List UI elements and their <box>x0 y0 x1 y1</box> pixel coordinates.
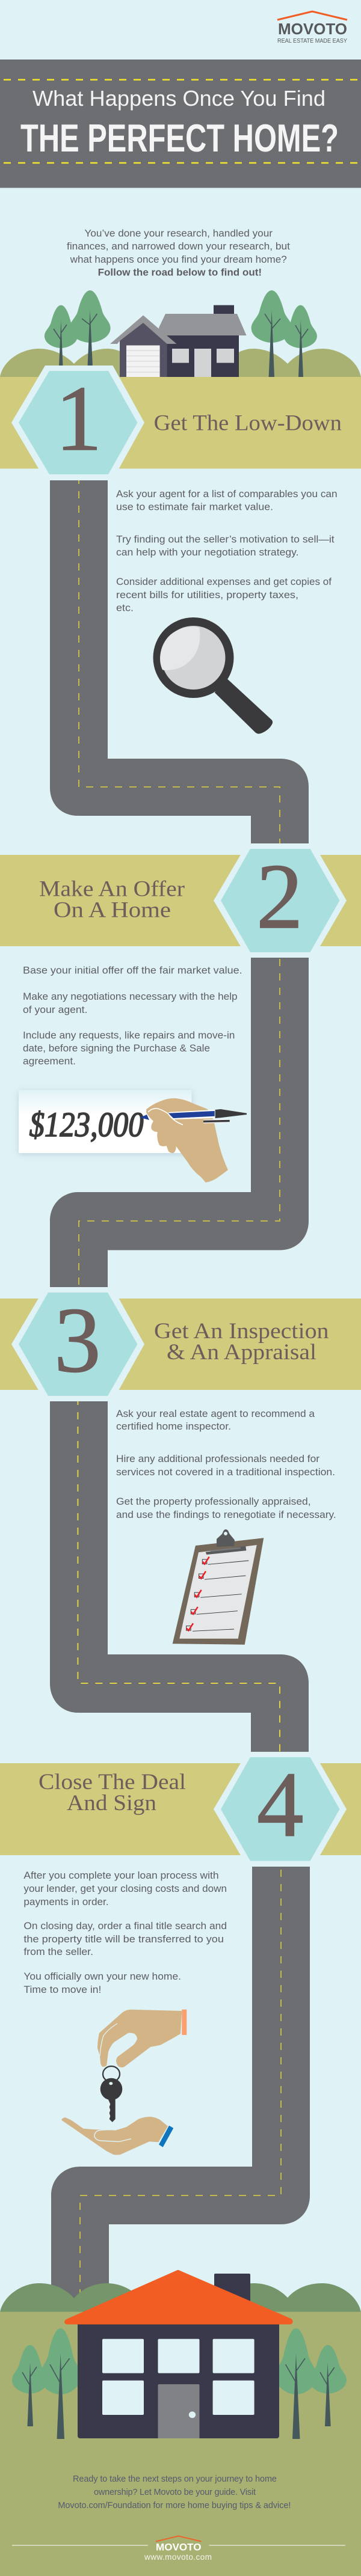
road: step 1 <box>50 480 309 844</box>
checklist rows <box>187 1559 207 1630</box>
number 1: 1 <box>55 367 102 470</box>
text: step 2 tips: date, before signing the Purchase & Sale <box>23 1042 210 1054</box>
pen <box>168 1110 215 1119</box>
road: step 3 <box>50 1401 309 1753</box>
logo: Movoto top: MOVOTO <box>278 20 347 38</box>
text: step 3 tips: services not covered in a traditional inspection. <box>116 1466 335 1478</box>
hand <box>146 1098 228 1182</box>
icon: clipboard checklist <box>173 1529 264 1645</box>
text: step 4 tips: payments in order. <box>23 1896 109 1908</box>
text: step 1 tips: recent bills for utilities, property taxes, <box>116 589 298 601</box>
title line 1: What Happens Once You Find <box>32 86 326 111</box>
handwritten price: $123,000 <box>29 1105 144 1144</box>
heading 4: Close The Deal <box>39 1770 186 1794</box>
heading 3: Get An Inspection <box>154 1319 329 1344</box>
intro text: You’ve done your research, handled your <box>84 227 273 239</box>
top landscape: hills <box>0 349 361 377</box>
top landscape: trees right <box>251 290 317 377</box>
text: step 1 tips: Consider additional expenses and get copies of <box>116 576 332 587</box>
text: step 4 tips <box>23 1870 227 1995</box>
bottom landscape: hills <box>0 2283 361 2312</box>
text: step 2 tips <box>23 964 242 1067</box>
intro text: Follow the road below to find out! <box>98 267 262 278</box>
text: step 1 tips: use to estimate fair market value. <box>116 501 273 512</box>
bottom landscape: trees left <box>12 2328 81 2439</box>
banner: step 4: And Sign <box>67 1791 156 1816</box>
text: step 1 tips: Ask your agent for a list of comparables you can <box>116 488 338 500</box>
heading 2: Make An Offer <box>39 877 185 902</box>
number 4: 4 <box>257 1753 303 1856</box>
hexagon 3 <box>11 1287 144 1401</box>
footer text: Movoto.com/Foundation for more home buying tips & advice! <box>58 2501 291 2510</box>
title banner <box>0 60 361 188</box>
text: step 4 tips: On closing day, order a final title search and <box>23 1920 227 1932</box>
text: step 4 tips: your lender, get your closing costs and down <box>23 1883 227 1894</box>
hexagon 1 <box>11 366 144 480</box>
text: step 4 tips: After you complete your loan process with <box>23 1870 219 1881</box>
text: step 2 tips: of your agent. <box>23 1004 87 1015</box>
footer text <box>58 2474 291 2510</box>
text: step 4 tips: the property title will be transferred to you <box>23 1933 224 1945</box>
banner: step 4 <box>0 1752 361 1867</box>
key <box>103 2066 120 2082</box>
text: step 1 tips <box>116 488 338 614</box>
bottom landscape: ground <box>0 2312 361 2576</box>
icon: hands passing key <box>61 2010 187 2155</box>
footer logo and url: www.movoto.com <box>144 2553 212 2562</box>
icon: magnifying glass <box>153 617 273 734</box>
text: step 1 tips: etc. <box>116 602 134 614</box>
footer logo and url: MOVOTO <box>156 2542 201 2553</box>
icon: final home <box>64 2270 293 2438</box>
banner: step 1 <box>0 366 361 480</box>
logo: Movoto top <box>277 11 347 44</box>
text: step 3 tips: Hire any additional professionals needed for <box>116 1453 319 1464</box>
text: step 2 tips: agreement. <box>23 1056 76 1067</box>
text: step 2 tips: Make any negotiations necessary with the help <box>23 991 238 1002</box>
text: step 3 tips: and use the findings to renegotiate if necessary. <box>116 1509 336 1520</box>
footer text: Ready to take the next steps on your journey to home <box>73 2474 277 2484</box>
text: step 4 tips: Time to move in! <box>23 1984 101 1995</box>
text: step 1 tips: can help with your negotiation strategy. <box>116 546 298 558</box>
intro text: what happens once you find your dream home? <box>70 254 287 265</box>
intro text <box>67 227 290 278</box>
footer text: ownership? Let Movoto be your guide. Visit <box>94 2488 256 2497</box>
text: step 1 tips: Try finding out the seller’s motivation to sell—it <box>116 533 335 545</box>
banner: step 2 <box>0 843 361 958</box>
banner: step 3 <box>0 1287 361 1401</box>
text: step 2 tips: Base your initial offer off the fair market value. <box>23 964 242 976</box>
icon: starter house <box>110 305 247 377</box>
text: step 4 tips: from the seller. <box>23 1946 93 1957</box>
bottom landscape: trees right <box>276 2328 347 2439</box>
upper hand <box>97 2010 182 2067</box>
logo: Movoto top: REAL ESTATE MADE EASY <box>277 37 347 44</box>
text: step 3 tips: certified home inspector. <box>116 1421 231 1432</box>
heading 1: Get The Low-Down <box>154 411 342 436</box>
road: step 4 <box>51 1866 310 2302</box>
number 3: 3 <box>54 1288 101 1392</box>
text: step 3 tips: Ask your real estate agent to recommend a <box>116 1408 315 1419</box>
banner: step 3: & An Appraisal <box>167 1340 316 1365</box>
text: step 2 tips: Include any requests, like repairs and move-in <box>23 1029 235 1041</box>
road: step 2 <box>50 958 309 1288</box>
icon: offer paper with handwritten price and hand <box>19 1090 247 1182</box>
number 2: 2 <box>256 845 303 948</box>
text: step 4 tips: You officially own your new home. <box>23 1971 181 1982</box>
lower hand <box>61 2117 168 2155</box>
text: step 3 tips: Get the property professionally appraised, <box>116 1496 311 1507</box>
text: step 3 tips <box>116 1408 336 1520</box>
banner: step 2: On A Home <box>54 898 171 922</box>
footer logo and url <box>12 2536 345 2562</box>
hexagon 2 <box>214 843 347 958</box>
intro text: finances, and narrowed down your research, but <box>67 240 290 252</box>
hexagon 4 <box>214 1752 347 1867</box>
top landscape: trees left <box>45 290 111 367</box>
